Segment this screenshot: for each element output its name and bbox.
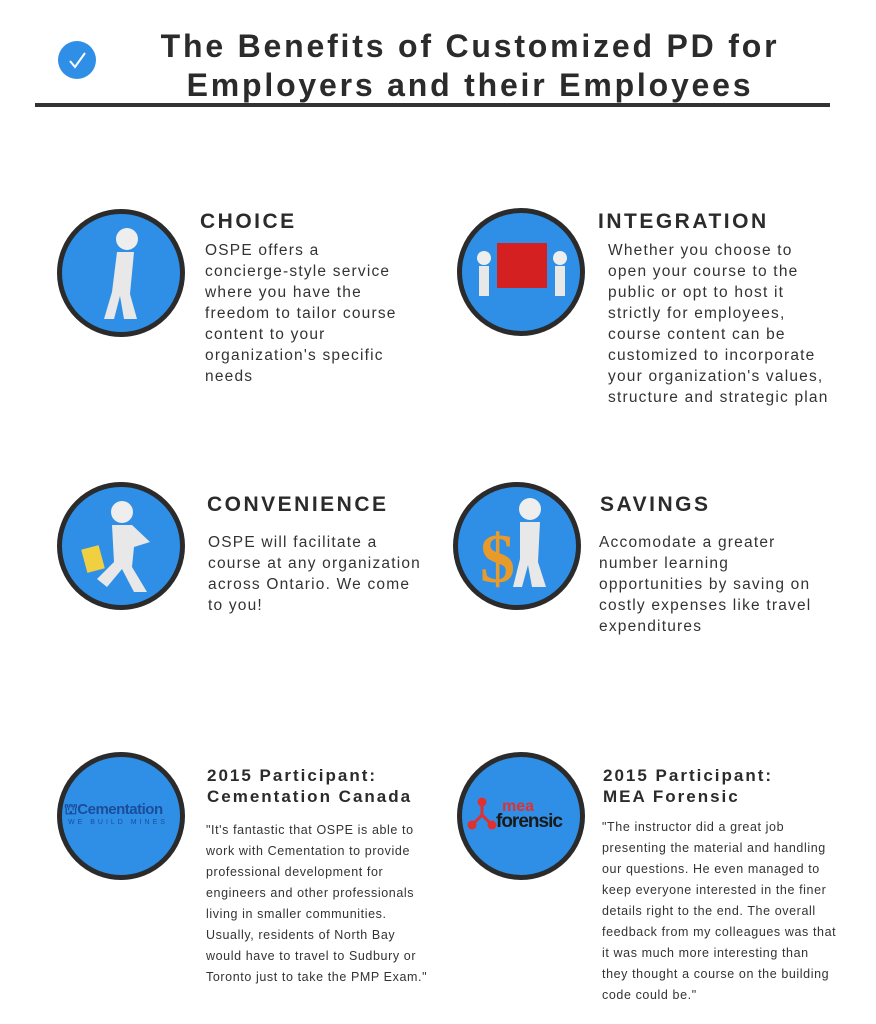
heading: cementation: Cementation Canada [207, 787, 412, 806]
title [161, 28, 779, 103]
heading: choice: CHOICE [200, 210, 297, 233]
text: integration: strictly for employees, [608, 305, 785, 322]
text: integration: structure and strategic plan [608, 389, 829, 406]
text: integration: customized to incorporate [608, 347, 815, 364]
text: choice: concierge-style service [205, 263, 390, 280]
text: choice: content to your [205, 326, 326, 343]
text: integration: open your course to the [608, 263, 798, 280]
text: choice: OSPE offers a [205, 242, 319, 259]
icon: mea forensic logo [457, 752, 585, 880]
quote: cementation: engineers and other professionals [206, 886, 414, 900]
heading: convenience: CONVENIENCE [207, 493, 389, 516]
panel: cementation testimonial [57, 752, 427, 984]
panel: mea forensic testimonial [457, 752, 836, 1002]
quote: cementation [206, 823, 427, 984]
quote: cementation: "It's fantastic that OSPE is able to [206, 823, 414, 837]
quote: cementation: work with Cementation to provide [206, 844, 410, 858]
quote: cementation: professional development for [206, 865, 383, 879]
quote: cementation: Usually, residents of North Bay [206, 928, 395, 942]
text: integration [608, 242, 829, 406]
quote: mea forensic: they thought a course on the building [602, 967, 829, 981]
heading: mea forensic: MEA Forensic [603, 787, 740, 806]
text: convenience [208, 534, 421, 614]
title: The Benefits of Customized PD for [161, 28, 779, 64]
title: Employers and their Employees [187, 67, 753, 103]
heading: savings: SAVINGS [600, 493, 710, 516]
panel: savings [453, 482, 811, 635]
quote: mea forensic: presenting the material and handling [602, 841, 826, 855]
text: convenience: to you! [208, 597, 263, 614]
quote: mea forensic: keep everyone interested in the finer [602, 883, 826, 897]
heading: mea forensic [603, 766, 773, 806]
quote: cementation: would have to travel to Sudbury or [206, 949, 416, 963]
icon: choice figure [57, 209, 185, 337]
icon: dollar figure [453, 482, 581, 610]
quote: mea forensic: details right to the end. The overall [602, 904, 816, 918]
text: savings [599, 534, 811, 635]
panel: integration [457, 208, 829, 406]
text: choice [205, 242, 397, 385]
icon: check mark [58, 41, 96, 79]
text: choice: needs [205, 368, 253, 385]
heading: mea forensic: 2015 Participant: [603, 766, 773, 785]
icon: cementation logo: WE BUILD MINES [68, 819, 168, 826]
icon: puzzle [457, 208, 585, 336]
text: integration: Whether you choose to [608, 242, 793, 259]
text: choice: where you have the [205, 284, 362, 301]
text: convenience: across Ontario. We come [208, 576, 410, 593]
quote: mea forensic: feedback from my colleagues was that [602, 925, 836, 939]
text: savings: costly expenses like travel [599, 597, 811, 614]
quote: mea forensic [602, 820, 836, 1002]
text: choice: organization's specific [205, 347, 384, 364]
panel: convenience [57, 482, 421, 614]
quote: cementation: Toronto just to take the PMP Exam." [206, 970, 427, 984]
icon: running figure [57, 482, 185, 610]
text: convenience: course at any organization [208, 555, 421, 572]
icon: mea forensic logo: mea [502, 798, 534, 815]
text: integration: your organization's values, [608, 368, 823, 385]
text: integration: public or opt to host it [608, 284, 784, 301]
quote: mea forensic: our questions. He even managed to [602, 862, 820, 876]
quote: cementation: living in smaller communities. [206, 907, 387, 921]
heading: cementation [207, 766, 412, 806]
text: savings: Accomodate a greater [599, 534, 776, 551]
heading: integration: INTEGRATION [598, 210, 769, 233]
quote: mea forensic: "The instructor did a great job [602, 820, 784, 834]
icon: dollar figure: $ [480, 521, 515, 598]
panel: choice [57, 209, 397, 385]
text: choice: freedom to tailor course [205, 305, 397, 322]
icon: cementation logo [57, 752, 185, 880]
text: savings: opportunities by saving on [599, 576, 810, 593]
quote: mea forensic: it was much more interesting than [602, 946, 809, 960]
icon: cementation logo: ⛫Cementation [64, 801, 163, 818]
text: savings: expenditures [599, 618, 702, 635]
quote: mea forensic: code could be." [602, 988, 697, 1002]
text: integration: course content can be [608, 326, 786, 343]
heading: cementation: 2015 Participant: [207, 766, 377, 785]
icon: mea forensic logo: forensic [496, 811, 563, 832]
title underline [35, 103, 830, 107]
text: convenience: OSPE will facilitate a [208, 534, 377, 551]
text: savings: number learning [599, 555, 729, 572]
